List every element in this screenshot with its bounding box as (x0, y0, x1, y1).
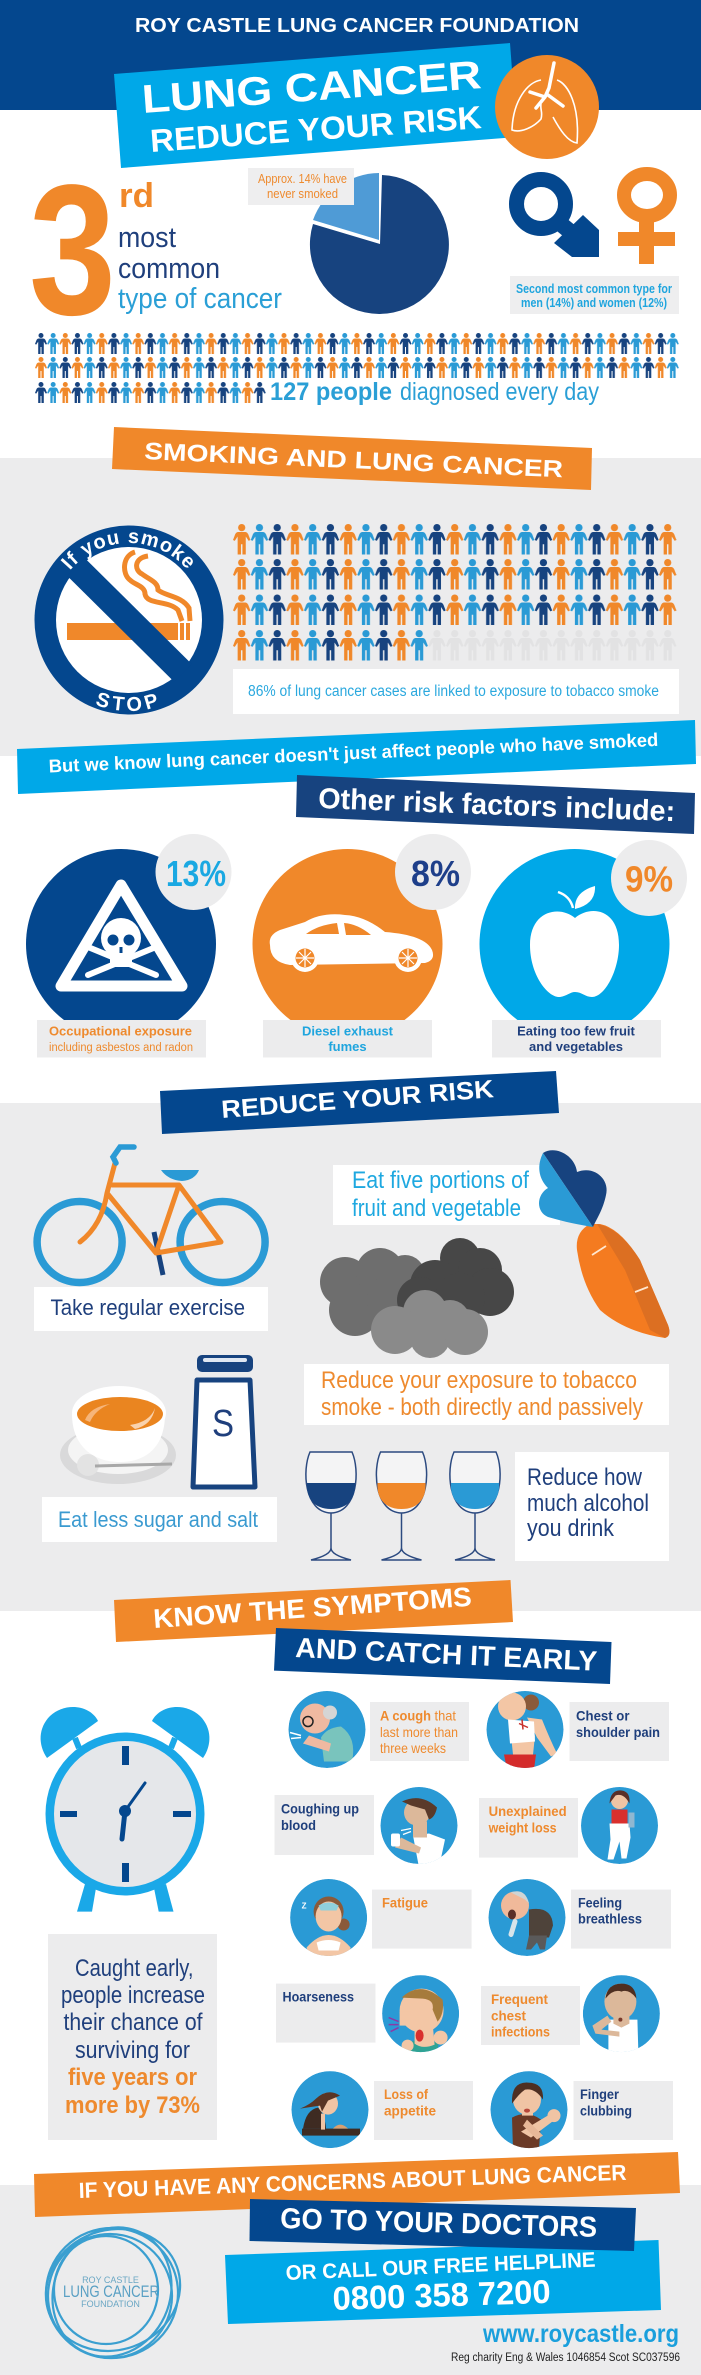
caption: 86 percent: 86% of lung cancer cases are linked to exposure to tobacco smoke (248, 683, 659, 700)
big number 3rd most common: common (118, 253, 220, 285)
icon: wine glasses (306, 1452, 500, 1560)
glass navy (306, 1452, 356, 1560)
symptom: finger clubbing: clubbing (580, 2102, 632, 2118)
logo: Roy Castle Lung Cancer Foundation: FOUNDATION (81, 2299, 140, 2309)
label: alcohol: Reduce how (527, 1464, 643, 1491)
symptom: breathless: breathless (578, 1911, 642, 1927)
icon: man with sore throat (382, 1975, 459, 2054)
icon: apple (530, 886, 619, 997)
big number 3rd most common: most (118, 222, 176, 254)
percentage bubble (156, 834, 232, 910)
symptom: persistent cough (288, 1691, 469, 1768)
label: tobacco smoke: smoke - both directly and passively (321, 1394, 643, 1421)
icon: woman examining fingers (490, 2071, 568, 2150)
heading: know the symptoms (114, 1580, 513, 1642)
icon: skull warning triangle (61, 885, 182, 986)
icon: man coughing into hand (583, 1975, 660, 2054)
icon: bicycle (37, 1147, 265, 1282)
pie label (248, 168, 354, 205)
symptom: coughing up blood: Coughing up (281, 1800, 359, 1816)
icon: man coughing blood (380, 1787, 458, 1868)
symptom: breathless (488, 1879, 671, 1956)
symptom: finger clubbing: Finger (580, 2086, 620, 2102)
big number 3rd most common: rd (119, 177, 154, 215)
label (263, 1020, 432, 1058)
icon: female symbol (618, 174, 675, 264)
percentage bubble: 8% (411, 853, 460, 894)
label: sugar and salt (42, 1497, 277, 1542)
logo: Roy Castle Lung Cancer Foundation: LUNG CANCER (63, 2282, 159, 2301)
127 people caption: diagnosed every day (400, 378, 599, 406)
icon: car (270, 914, 433, 972)
symptom: fatigue: Fatigue (382, 1894, 428, 1910)
callout: caught early: their chance of (64, 2009, 203, 2036)
male female caption (510, 276, 679, 314)
icon: cup of tea (60, 1386, 176, 1484)
label: Diesel exhaust (302, 1024, 394, 1038)
symptom: hoarseness (276, 1975, 459, 2054)
symptom: chest or shoulder pain (486, 1691, 669, 1770)
section background: smoking (0, 458, 701, 756)
symptom: persistent cough: last more than (380, 1724, 458, 1740)
big number 3rd most common: 3 (29, 147, 116, 354)
label: regular exercise: Take regular exercise (50, 1295, 245, 1320)
symptom: fatigue (290, 1879, 472, 1958)
callout: caught early: people increase (61, 1982, 205, 2009)
symptom: loss of appetite: Loss of (384, 2086, 428, 2102)
heading: catch it early: AND CATCH IT EARLY (295, 1632, 598, 1677)
pie label: Approx. 14% have (258, 172, 347, 186)
symptom: chest infections: infections (491, 2024, 550, 2040)
label: and vegetables (529, 1039, 623, 1054)
banner: helpline: 0800 358 7200 (332, 2273, 551, 2317)
banner: go to your doctors: GO TO YOUR DOCTORS (280, 2203, 598, 2244)
title line 2: REDUCE YOUR RISK (149, 99, 483, 159)
banner: concerns (34, 2152, 680, 2217)
symptom: chest or shoulder pain: shoulder pain (576, 1724, 660, 1740)
section background: footer (0, 2185, 701, 2375)
127 people caption: 127 people (270, 378, 392, 406)
symptom: weight loss: weight loss (488, 1820, 557, 1836)
symptom: coughing up blood (274, 1787, 458, 1868)
heading: reduce your risk: REDUCE YOUR RISK (220, 1075, 495, 1124)
sign text top: If you smoke (60, 532, 193, 570)
icon: salt shaker: S (212, 1403, 234, 1445)
label: sugar and salt: Eat less sugar and salt (58, 1507, 258, 1532)
callout: caught early: surviving for (75, 2037, 190, 2064)
label: regular exercise (34, 1287, 268, 1331)
symptom: chest infections (481, 1975, 660, 2054)
risk factor: fruit and vegetables (480, 840, 687, 1058)
banner: go to your doctors (250, 2199, 636, 2251)
glass blue (450, 1452, 500, 1560)
label: five portions: Eat five portions of (352, 1167, 529, 1194)
sign text bottom: STOP (96, 692, 156, 712)
symptom: loss of appetite: appetite (384, 2102, 436, 2118)
icon: smoke clouds (320, 1238, 514, 1358)
website: www.roycastle.org (482, 2320, 679, 2348)
symptom: coughing up blood: blood (281, 1817, 316, 1833)
icon: woman at table (292, 2071, 368, 2148)
icon: tired woman: Z (302, 1902, 307, 1910)
pictogram: 127 people (35, 333, 679, 403)
percentage bubble: 13% (166, 853, 226, 894)
heading: smoking and lung cancer (112, 427, 592, 490)
symptom: loss of appetite (292, 2071, 473, 2148)
pie chart: never smoked share (248, 168, 449, 314)
label: including asbestos and radon (49, 1042, 193, 1054)
label: five portions: fruit and vegetable (352, 1195, 521, 1222)
banner: concerns: IF YOU HAVE ANY CONCERNS ABOUT LUNG CANCER (78, 2160, 627, 2203)
icon: salt shaker (193, 1355, 255, 1487)
heading: know the symptoms: KNOW THE SYMPTOMS (152, 1582, 473, 1634)
symptom: hoarseness: Hoarseness (282, 1988, 354, 2004)
organisation name: ROY CASTLE LUNG CANCER FOUNDATION (135, 15, 579, 37)
icon: lungs (495, 55, 599, 159)
label (492, 1020, 661, 1058)
title banner (114, 43, 517, 168)
icon: no smoking sign (34, 526, 224, 714)
heading: reduce your risk (160, 1071, 559, 1134)
label: tobacco smoke (304, 1364, 669, 1425)
male female caption: Second most common type for (516, 282, 672, 296)
risk factor: diesel exhaust (252, 834, 471, 1058)
label: tobacco smoke: Reduce your exposure to tobacco (321, 1367, 637, 1394)
pie label: never smoked (267, 187, 338, 201)
percentage bubble (395, 834, 471, 910)
banner: not just smokers (17, 720, 696, 794)
symptom: persistent cough: A cough that (380, 1708, 456, 1724)
banner: helpline: OR CALL OUR FREE HELPLINE (285, 2248, 596, 2285)
icon: alarm clock (41, 1707, 209, 1912)
symptom: persistent cough: three weeks (380, 1740, 446, 1756)
symptom: chest or shoulder pain: Chest or (576, 1708, 630, 1724)
heading: other risk factors: Other risk factors include: (318, 783, 676, 828)
callout: caught early: Caught early, (75, 1955, 194, 1982)
icon: bent over man (488, 1879, 566, 1956)
banner: not just smokers: But we know lung cancer doesn't just affect people who have smoked (48, 729, 659, 776)
label: Eating too few fruit (517, 1024, 636, 1038)
icon: woman holding chest (486, 1691, 564, 1770)
percentage bubble (611, 840, 687, 916)
icon: tired woman (290, 1879, 367, 1958)
logo: Roy Castle Lung Cancer Foundation: ROY CASTLE (82, 2275, 139, 2285)
heading: smoking and lung cancer: SMOKING AND LUNG CANCER (144, 438, 564, 483)
pictogram: 86 of 100 people (233, 524, 677, 660)
label: alcohol: you drink (527, 1515, 615, 1542)
risk factor: occupational exposure (26, 834, 232, 1058)
callout: caught early: more by 73% (65, 2092, 200, 2119)
callout: caught early: five years or (68, 2064, 197, 2091)
icon: male symbol (516, 180, 599, 257)
symptom: chest infections: Frequent (491, 1991, 548, 2007)
header band (0, 0, 701, 110)
label: Occupational exposure (49, 1024, 192, 1038)
big number 3rd most common: type of cancer (118, 283, 282, 315)
section background: reduce your risk (0, 1103, 701, 1611)
banner: helpline (225, 2240, 661, 2324)
glass orange (376, 1452, 427, 1560)
callout: caught early (48, 1934, 217, 2140)
title line 1: LUNG CANCER (140, 53, 483, 122)
label: alcohol: much alcohol (527, 1490, 649, 1517)
label: five portions (333, 1165, 560, 1225)
127 people caption (270, 378, 599, 406)
symptom: weight loss: Unexplained (489, 1803, 567, 1819)
symptom: breathless: Feeling (578, 1894, 622, 1910)
male female caption: men (14%) and women (12%) (521, 296, 667, 310)
label (37, 1020, 206, 1058)
icon: coughing man (288, 1691, 366, 1768)
percentage bubble: 9% (625, 858, 673, 900)
label: fumes (328, 1039, 367, 1054)
logo: Roy Castle Lung Cancer Foundation (29, 2208, 197, 2375)
symptom: chest infections: chest (491, 2008, 526, 2024)
heading: other risk factors (296, 775, 695, 834)
icon: carrot (539, 1150, 669, 1338)
icon: thin woman (581, 1787, 658, 1864)
label: alcohol (515, 1452, 669, 1561)
big number 3rd most common (29, 147, 282, 354)
symptom: finger clubbing (490, 2071, 673, 2150)
caption: 86 percent (233, 669, 679, 714)
symptom: weight loss (479, 1787, 658, 1864)
